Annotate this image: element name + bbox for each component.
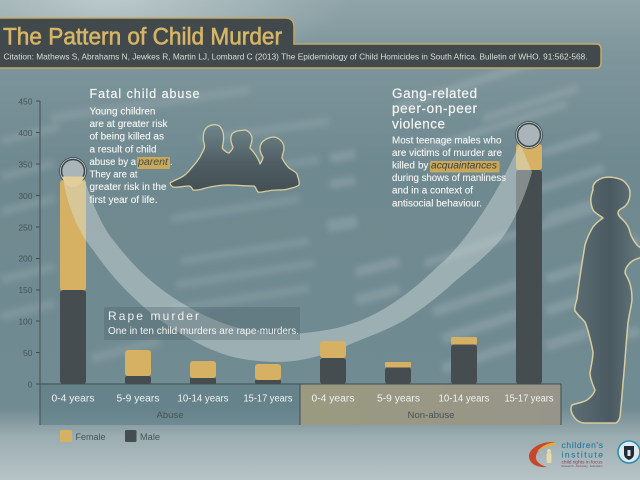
panel: rape murder callout — [104, 307, 300, 340]
group label: abuse: Abuse — [156, 410, 184, 420]
body: fatal child abuse: of being killed as — [90, 132, 164, 143]
group label: non-abuse: Non-abuse — [408, 410, 454, 420]
bars: abuse 5-9 years — [125, 350, 151, 384]
logo: university crest — [618, 441, 640, 463]
citation: Citation: Mathews S, Abrahams N, Jewkes R, Martin LJ, Lombard C (2013) The Epidemiology of Child Homicides in South Africa. Bulletin of WHO. 91:562-568. — [4, 52, 588, 62]
logo: children's institute — [529, 440, 603, 468]
title: The Pattern of Child Murder — [3, 24, 282, 50]
body: gang-related violence: Most teenage males who — [392, 136, 502, 146]
y axis labels: 150 — [18, 285, 33, 295]
logo: children's institute: Research · Advocacy · Education — [562, 464, 603, 468]
body: fatal child abuse: greater risk in the — [90, 182, 167, 193]
x axis labels: 0-4 years — [52, 394, 94, 404]
icon: crescent emblem — [529, 442, 556, 467]
text: rape murder note: One in ten child murders are rape-murders. — [108, 326, 299, 337]
arc connecting the two peaks — [63, 143, 532, 362]
bars: non-abuse 0-4 years — [320, 341, 346, 384]
body: fatal child abuse: . — [170, 157, 173, 168]
y axis labels: 250 — [18, 222, 33, 232]
panel: non-abuse band — [300, 384, 561, 425]
icon: silhouette of standing boy — [571, 177, 640, 423]
y axis labels: 450 — [18, 96, 33, 106]
bars: non-abuse 5-9 years — [385, 362, 411, 384]
legend: male: Male — [140, 432, 160, 442]
y axis labels: 50 — [23, 348, 33, 358]
y axis labels: 0 — [28, 380, 33, 390]
legend: female: Female — [76, 432, 106, 442]
logo: children's institute: child rights in focus — [562, 460, 603, 464]
logo: children's institute: institute — [562, 450, 603, 460]
y axis labels: 100 — [18, 316, 33, 326]
text block: gang-related violence — [392, 86, 506, 209]
body: gang-related violence: and in a context of — [392, 186, 473, 197]
heading: gang-related violence — [392, 86, 478, 132]
body: fatal child abuse: are at greater risk — [90, 119, 168, 130]
heading: fatal child abuse: Fatal child abuse — [90, 87, 200, 101]
y axis labels: 400 — [18, 128, 33, 138]
title banner — [0, 18, 601, 68]
body: gang-related violence: are victims of murder are — [392, 148, 502, 159]
x axis labels: 15-17 years — [244, 394, 292, 404]
y axis with ticks — [36, 101, 561, 425]
bars: abuse 10-14 years — [190, 361, 216, 384]
body: gang-related violence: acquaintances — [431, 160, 497, 172]
marker: peak of abuse 0-4 years — [60, 158, 86, 187]
heading: rape murder: Rape murder — [108, 309, 199, 323]
x axis labels: 5-9 years — [116, 394, 160, 404]
bars: non-abuse 10-14 years — [451, 337, 477, 384]
x axis labels: 15-17 years — [504, 394, 554, 404]
panel: abuse band — [40, 384, 300, 425]
bars: abuse 0-4 years — [60, 180, 86, 384]
x axis labels: 10-14 years — [178, 394, 228, 404]
body: gang-related violence: during shows of manliness — [392, 173, 506, 184]
body: fatal child abuse: a result of child — [90, 144, 156, 155]
heading: gang-related violence: violence — [392, 116, 445, 132]
heading: gang-related violence: Gang-related — [392, 86, 477, 101]
y axis labels: 200 — [18, 254, 33, 264]
body: fatal child abuse — [90, 106, 173, 206]
x axis labels: 10-14 years — [438, 394, 490, 404]
x axis labels — [52, 394, 554, 404]
text: children's institute wordmark: children's — [562, 440, 603, 450]
body: gang-related violence — [392, 136, 506, 209]
body: gang-related violence: antisocial behaviour. — [392, 198, 482, 209]
heading: gang-related violence: peer-on-peer — [392, 101, 478, 116]
body: fatal child abuse: parent — [137, 157, 169, 168]
chart: pattern of child murder by age and sex — [18, 96, 561, 425]
x axis labels: 5-9 years — [377, 394, 420, 404]
text block: fatal child abuse — [90, 87, 200, 206]
icon: silhouette of three children — [170, 125, 299, 192]
bars: non-abuse 15-17 years — [516, 144, 542, 384]
legend — [60, 430, 160, 442]
x axis labels: 0-4 years — [312, 394, 354, 404]
marker: peak of non-abuse 15-17 years — [516, 122, 542, 148]
y axis labels — [18, 96, 33, 390]
y axis labels: 350 — [18, 160, 33, 170]
body: fatal child abuse: They are at — [90, 170, 138, 181]
body: fatal child abuse: Young children — [90, 106, 156, 118]
body: fatal child abuse: first year of life. — [90, 195, 158, 206]
bars: abuse 15-17 years — [255, 364, 281, 384]
body: gang-related violence: killed by — [392, 160, 428, 172]
y axis labels: 300 — [18, 191, 33, 201]
body: fatal child abuse: abuse by a — [90, 157, 136, 168]
